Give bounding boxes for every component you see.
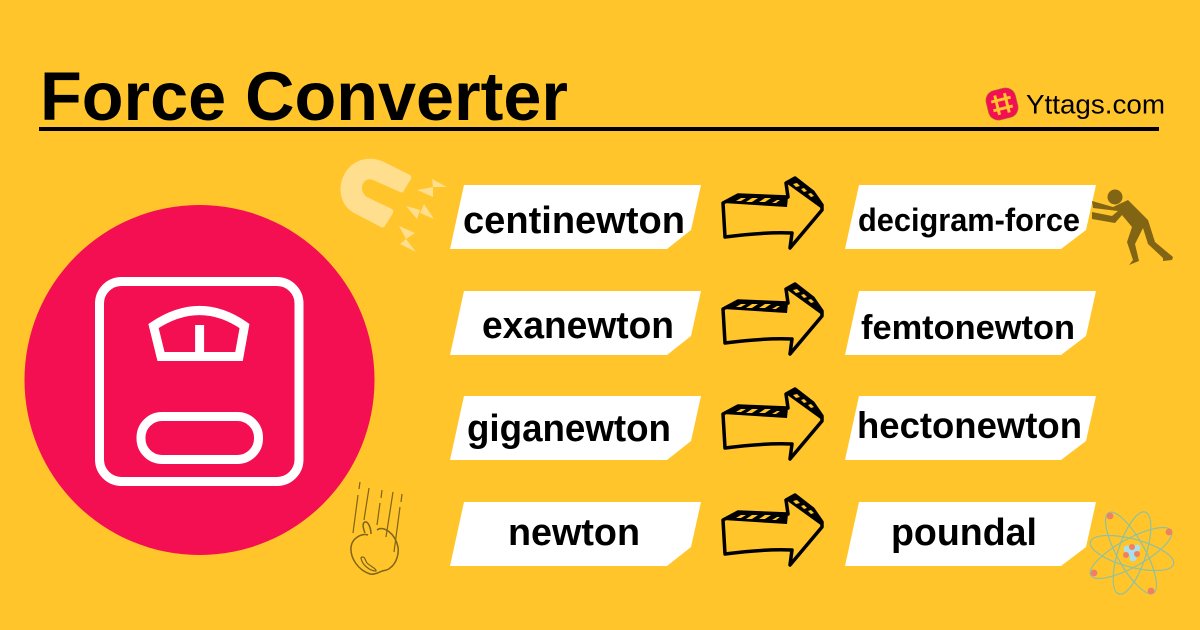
logo: Yttags.com: Yttags.com [1026,90,1165,120]
label box: newton [450,502,701,566]
logo: Yttags.com [984,86,1165,122]
arrow [723,495,822,565]
label box: decigram-force [845,185,1096,249]
label box: poundal [845,502,1096,566]
title underline [39,127,1159,131]
label box: exanewton [450,291,701,355]
icon: falling apple [351,482,402,574]
label box: giganewton [450,396,701,460]
icon: weighing scale [100,282,299,482]
icon: hash badge [984,86,1020,122]
label box: centinewton: centinewton [463,200,685,242]
label box: decigram-force: decigram-force [858,202,1080,238]
title: Force Converter [40,58,568,135]
row 1 [450,178,1096,249]
icon: person pushing [1092,190,1173,265]
label box: exanewton: exanewton [482,305,674,347]
red circle with scale icon [24,205,374,555]
label box: poundal: poundal [891,512,1037,554]
label box: giganewton: giganewton [467,408,671,450]
label box: hectonewton: hectonewton [857,405,1082,446]
icon: magnet [341,159,447,252]
arrow [723,178,822,248]
label box: centinewton [450,185,701,249]
label box: femtonewton [845,291,1096,355]
arrow [723,389,822,459]
row 4 [450,495,1096,566]
row 2 [450,284,1096,355]
icon: atom [1084,506,1178,600]
row 3 [450,389,1096,460]
label box: hectonewton [845,396,1096,460]
arrow [723,284,822,354]
label box: femtonewton: femtonewton [861,309,1075,347]
label box: newton: newton [508,512,640,554]
